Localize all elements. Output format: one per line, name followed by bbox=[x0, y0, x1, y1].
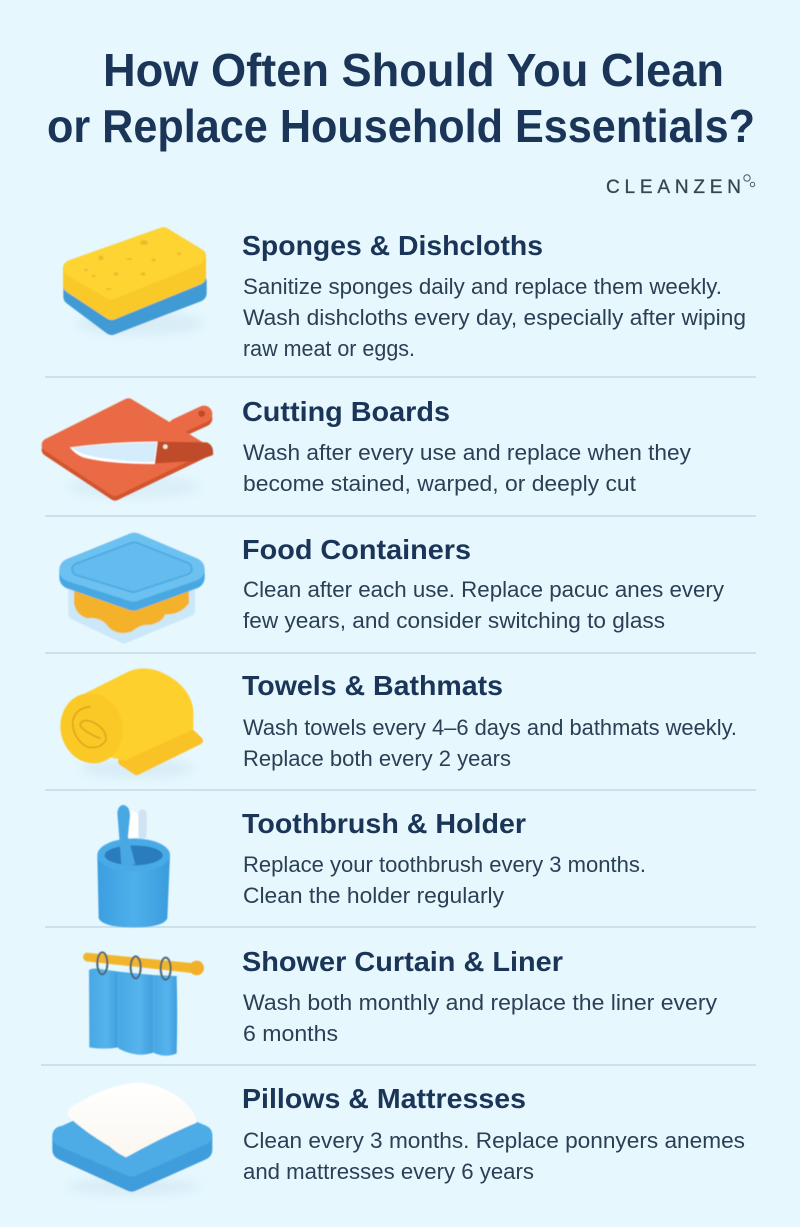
text: towels and bathmats bbox=[243, 715, 737, 771]
icon: sponge bbox=[71, 236, 203, 335]
text: shower curtain and liner: Wash both monthly and replace the liner every bbox=[243, 990, 717, 1015]
text: toothbrush and holder: Clean the holder regularly bbox=[243, 883, 504, 908]
text: food containers: Clean after each use. Replace pacuc anes every bbox=[243, 577, 724, 602]
text: toothbrush and holder bbox=[243, 852, 646, 908]
text: sponges: raw meat or eggs. bbox=[243, 336, 415, 361]
text: shower curtain and liner bbox=[243, 990, 717, 1046]
text: towels and bathmats: Wash towels every 4–6 days and bathmats weekly. bbox=[243, 715, 737, 740]
panel: towels and bathmats bbox=[53, 668, 737, 778]
text: shower curtain and liner: 6 months bbox=[243, 1021, 338, 1046]
text: sponges: Wash dishcloths every day, especially after wiping bbox=[243, 305, 746, 330]
panel: pillows and mattresses bbox=[62, 1082, 745, 1195]
heading: food containers: Food Containers bbox=[242, 534, 471, 565]
text: food containers bbox=[243, 577, 724, 633]
title: or Replace Household Essentials? bbox=[47, 100, 755, 152]
text: pillows and mattresses bbox=[243, 1128, 745, 1184]
text: pillows and mattresses: and mattresses every 6 years bbox=[243, 1159, 534, 1184]
icon: toothbrush in cup bbox=[97, 805, 170, 927]
heading: sponges: Sponges & Dishcloths bbox=[242, 230, 543, 261]
icon: shower curtain on rod bbox=[83, 952, 204, 1056]
text: sponges: Sanitize sponges daily and replace them weekly. bbox=[243, 274, 722, 299]
icon: pillow on mattress bbox=[62, 1082, 202, 1195]
heading: towels and bathmats: Towels & Bathmats bbox=[242, 670, 503, 701]
icon: rolled towel bbox=[53, 668, 199, 778]
title: How Often Should You Clean bbox=[103, 44, 724, 96]
icon: cutting board and knife bbox=[48, 405, 213, 498]
panel: toothbrush and holder bbox=[97, 805, 646, 927]
heading: toothbrush and holder: Toothbrush & Holder bbox=[242, 808, 526, 839]
text: cutting boards: become stained, warped, or deeply cut bbox=[243, 471, 636, 496]
panel: sponges and dishcloths bbox=[71, 230, 746, 361]
text: food containers: few years, and consider switching to glass bbox=[243, 608, 665, 633]
heading: shower curtain and liner: Shower Curtain & Liner bbox=[242, 946, 563, 977]
text: cutting boards: Wash after every use and replace when they bbox=[243, 440, 691, 465]
logo: CleanZen: CLEANZEN bbox=[606, 177, 741, 198]
title bbox=[47, 44, 755, 152]
text: towels and bathmats: Replace both every 2 years bbox=[243, 746, 511, 771]
text: cutting boards bbox=[243, 440, 691, 496]
panel: shower curtain and liner bbox=[83, 946, 717, 1056]
panel: cutting boards bbox=[48, 396, 691, 498]
panel: food containers bbox=[71, 534, 724, 637]
heading: pillows and mattresses: Pillows & Mattresses bbox=[242, 1083, 526, 1114]
text: pillows and mattresses: Clean every 3 months. Replace ponnyers anemes bbox=[243, 1128, 745, 1153]
text: sponges bbox=[243, 274, 746, 361]
icon: food container bbox=[71, 544, 193, 637]
text: toothbrush and holder: Replace your toothbrush every 3 months. bbox=[243, 852, 646, 877]
heading: cutting boards: Cutting Boards bbox=[242, 396, 450, 427]
